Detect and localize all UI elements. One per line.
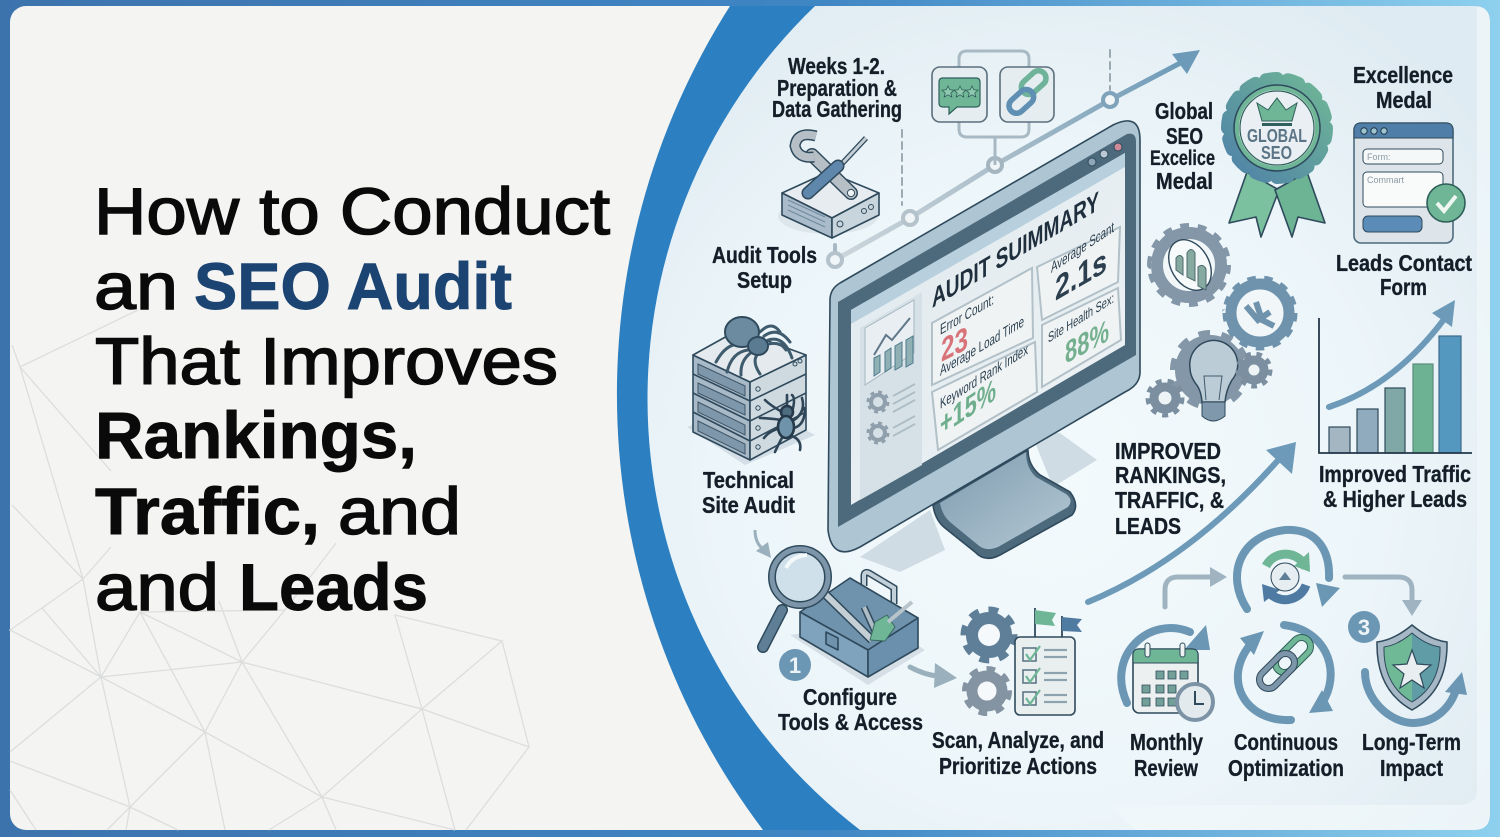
labels: Weeks 1-2.	[788, 53, 885, 79]
screen metrics	[940, 218, 1114, 443]
window dots	[1088, 143, 1122, 166]
labels	[702, 53, 1472, 781]
labels: Preparation &	[777, 75, 897, 101]
labels: IMPROVED	[1115, 438, 1221, 464]
medal text: GLOBAL	[1247, 126, 1307, 146]
step badge 1: 1	[789, 653, 801, 678]
title: SEO Audit	[194, 249, 512, 323]
icon: long-term shield	[1348, 611, 1467, 723]
icon: global SEO medal	[1228, 79, 1326, 237]
step badge 1	[779, 649, 811, 681]
labels: & Higher Leads	[1323, 486, 1467, 512]
screen metrics: Error Count:	[940, 291, 994, 339]
step badge 3: 3	[1358, 615, 1370, 640]
title: Leads	[239, 550, 428, 624]
labels: Improved Traffic	[1319, 461, 1471, 487]
icon: chain link cycle	[1238, 625, 1333, 720]
decorative polygon mesh	[10, 310, 529, 830]
labels: Leads Contact	[1336, 250, 1472, 276]
labels: Tools & Access	[778, 709, 923, 735]
icon: gears and lightbulb	[1148, 227, 1294, 421]
labels: Impact	[1380, 755, 1443, 781]
screen metrics: Site Health Sex:	[1048, 290, 1114, 347]
labels: Long-Term	[1362, 729, 1461, 755]
monitor bezel	[828, 121, 1140, 552]
labels: RANKINGS,	[1115, 462, 1226, 488]
form field labels: Form:	[1367, 152, 1390, 162]
icon: gears and checklist	[964, 608, 1082, 715]
labels: Technical	[703, 467, 794, 493]
summary cards	[932, 227, 1121, 450]
icon: leads contact form	[1354, 123, 1465, 243]
screen metrics: Keyword Rank Index	[940, 340, 1028, 413]
icon: review stars	[932, 67, 987, 122]
monitor screen	[851, 153, 1125, 505]
labels: Prioritize Actions	[939, 753, 1097, 779]
labels: Site Audit	[702, 492, 795, 518]
large growth arrow	[1088, 442, 1296, 602]
screen metrics: 2.1s	[1055, 240, 1107, 308]
screen metrics: 23	[941, 319, 968, 370]
small arrow to toolbox	[755, 530, 771, 558]
timeline arrow	[828, 50, 1200, 267]
title: Traffic,	[95, 474, 320, 548]
screen metrics: Average Load Time	[940, 313, 1024, 380]
labels: Scan, Analyze, and	[932, 727, 1104, 753]
form field labels	[1367, 152, 1405, 185]
right panel edge strip	[1110, 6, 1490, 830]
bent arrow to long-term impact	[1345, 577, 1422, 616]
screen metrics: 88%	[1065, 313, 1109, 371]
title: That Improves	[95, 324, 558, 398]
blue arc ring	[617, 6, 1490, 830]
screen heading: AUDIT SUIMMARY	[932, 186, 1099, 314]
sidebar	[860, 292, 922, 500]
panel: right infographic background	[647, 6, 1490, 830]
labels: Optimization	[1228, 755, 1344, 781]
labels: Medal	[1156, 168, 1213, 194]
monitor shadow	[860, 430, 1097, 572]
spider on top	[716, 317, 792, 375]
title: Rankings,	[95, 398, 417, 472]
labels: Form	[1380, 274, 1427, 300]
screen metrics: +15%	[940, 372, 996, 443]
labels: Monthly	[1130, 729, 1203, 755]
spider on side	[760, 395, 805, 452]
labels: SEO	[1166, 123, 1203, 149]
title: an	[94, 249, 178, 323]
labels: LEADS	[1115, 513, 1181, 539]
monitor stand	[933, 450, 1076, 558]
labels: Audit Tools	[712, 242, 817, 268]
icon: toolbox with magnifier	[763, 549, 925, 685]
labels: Global	[1155, 98, 1213, 124]
labels: Continuous	[1234, 729, 1338, 755]
bent arrow to optimization	[1165, 567, 1227, 607]
labels: Configure	[803, 684, 897, 710]
title	[94, 174, 610, 624]
icon: chain link box	[1000, 67, 1054, 122]
arrow to scan step	[910, 663, 957, 688]
labels: Excelice	[1150, 147, 1215, 170]
labels: Excellence	[1353, 62, 1453, 88]
screen metrics: Average Scant	[1051, 218, 1114, 277]
labels: Review	[1134, 755, 1198, 781]
icon: tools on server	[778, 135, 879, 238]
icon: optimization cycle	[1237, 530, 1340, 609]
form field labels: Commart	[1367, 175, 1405, 185]
labels: TRAFFIC, &	[1115, 487, 1224, 513]
labels: Setup	[737, 267, 792, 293]
chart: improved traffic bars	[1319, 300, 1472, 453]
monitor	[828, 121, 1140, 572]
title: How to Conduct	[94, 174, 610, 248]
title: and	[95, 550, 219, 624]
labels: Medal	[1376, 87, 1432, 113]
icon: calendar with clock	[1121, 625, 1213, 720]
medal text	[1247, 126, 1307, 163]
title: and	[338, 474, 461, 548]
medal text: SEO	[1261, 143, 1292, 163]
connector to icon boxes	[959, 51, 1029, 165]
labels: Data Gathering	[772, 96, 902, 122]
icon: server stack with spiders	[687, 317, 815, 465]
